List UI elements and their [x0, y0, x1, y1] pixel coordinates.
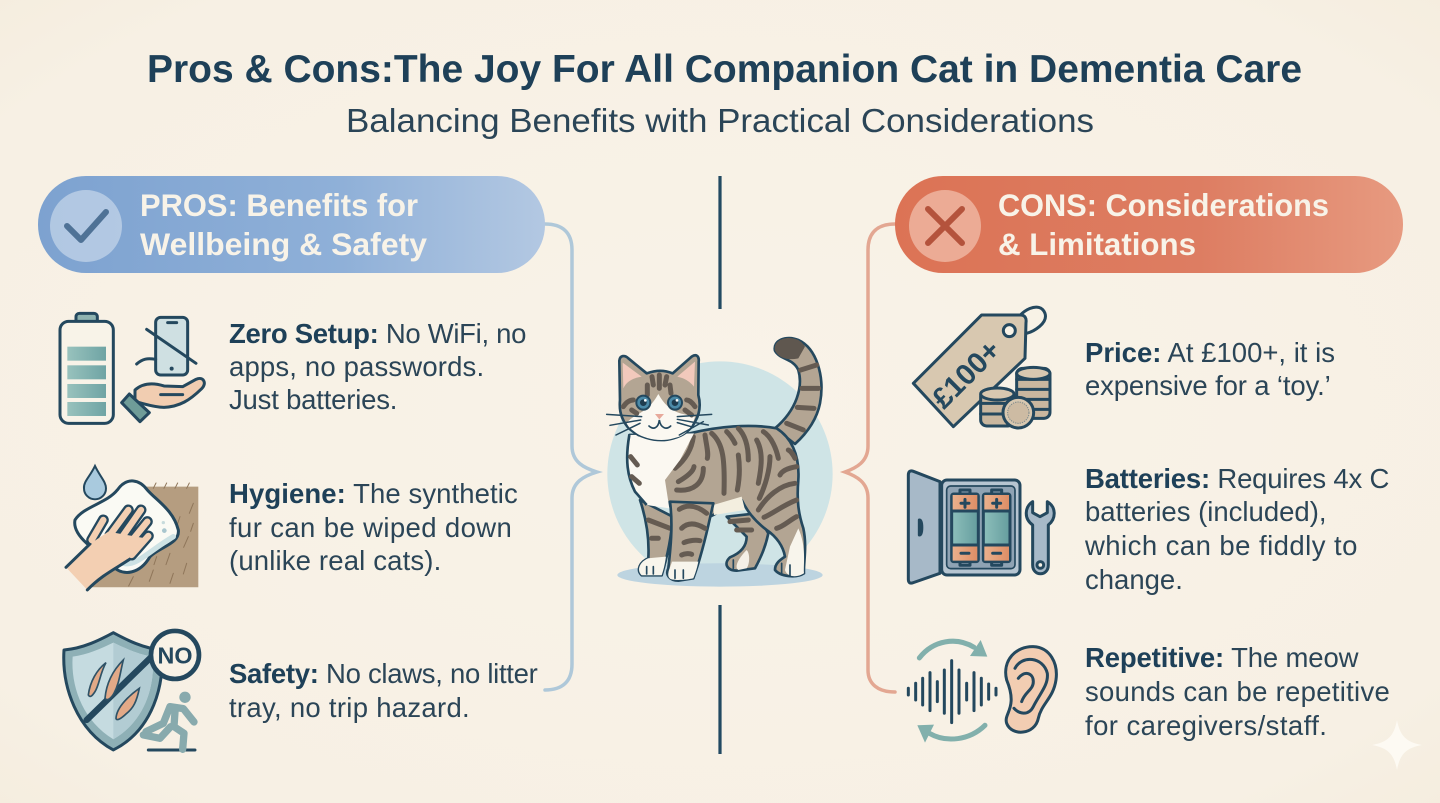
text: batteries: which can be fiddly to: [1084, 530, 1358, 561]
icon: sparkle watermark: [1372, 720, 1422, 770]
text: safety: Safety: No claws, no litter: [229, 658, 538, 689]
icon: sound waves and ear: [908, 640, 1056, 743]
icon: price tag and coins: [913, 307, 1050, 428]
text: zero setup: [229, 318, 526, 415]
text: price: Price: At £100+, it is: [1085, 337, 1335, 368]
text: hygiene: [229, 478, 518, 576]
text: repetitive: [1085, 642, 1390, 741]
title: Pros & Cons:The Joy For All Companion Cat in Dementia Care: [147, 48, 1302, 91]
text: hygiene: Hygiene: The synthetic: [229, 478, 518, 509]
cons header pill: & Limitations: [998, 226, 1196, 262]
text: repetitive: Repetitive: The meow: [1085, 642, 1359, 673]
text: batteries: [1084, 463, 1389, 595]
icon: battery compartment and wrench: [908, 471, 1054, 583]
text: safety: tray, no trip hazard.: [229, 692, 470, 723]
pros header pill: [38, 176, 545, 273]
subtitle: Balancing Benefits with Practical Considerations: [346, 102, 1094, 139]
text: batteries: Batteries: Requires 4x C: [1085, 463, 1389, 494]
panel: pros: [38, 176, 597, 750]
icon: check mark: [50, 190, 122, 262]
icon: wipe synthetic fur: [66, 466, 198, 590]
pros connector bracket: [545, 224, 597, 690]
text: zero setup: Zero Setup: No WiFi, no: [229, 318, 526, 349]
text: price: [1085, 337, 1335, 401]
icon: price tag and coins: £100+: [926, 334, 1007, 415]
icon: cross mark: [909, 190, 981, 262]
text: safety: [229, 658, 538, 723]
cons heading: CONS: Considerations: [998, 187, 1329, 223]
icon: safety shield: NO: [157, 642, 192, 668]
text: zero setup: apps, no passwords.: [229, 351, 484, 382]
text: hygiene: fur can be wiped down: [229, 512, 512, 543]
pros heading: PROS: Benefits for: [140, 187, 418, 223]
cons connector bracket: [845, 224, 895, 692]
text: repetitive: sounds can be repetitive: [1085, 676, 1390, 707]
icon: safety shield: [64, 631, 199, 750]
text: batteries: batteries (included),: [1085, 496, 1327, 527]
text: price: expensive for a ‘toy.’: [1085, 370, 1331, 401]
text: batteries: change.: [1085, 564, 1183, 595]
text: hygiene: (unlike real cats).: [229, 545, 441, 576]
panel: cons: [845, 176, 1403, 743]
cons header pill: [895, 176, 1403, 273]
pros header pill: Wellbeing & Safety: [140, 226, 427, 262]
text: zero setup: Just batteries.: [229, 384, 397, 415]
center divider top: [718, 176, 722, 309]
illustration: tabby cat: [607, 338, 833, 587]
text: repetitive: for caregivers/staff.: [1085, 710, 1327, 741]
icon: battery and no phone: [60, 313, 204, 423]
center divider bottom: [718, 605, 722, 754]
